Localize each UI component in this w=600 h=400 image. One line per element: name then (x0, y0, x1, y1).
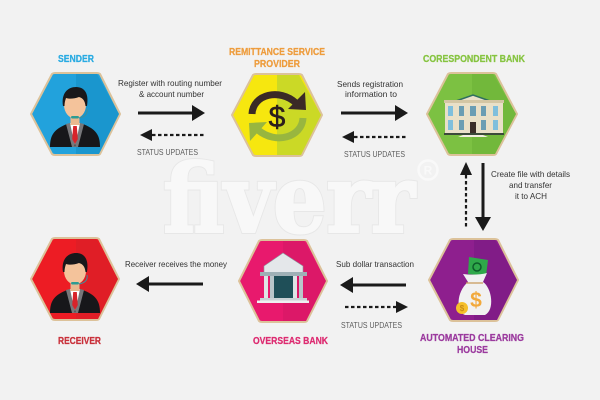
step 1 label: & account number (139, 89, 204, 99)
panel: remittance service provider (229, 47, 325, 156)
panel: overseas bank (239, 240, 329, 347)
step 4 label: Sub dollar transaction (336, 259, 414, 269)
watermark: fiverr logo: fiverr (163, 144, 417, 255)
arrow: remittance to corespondent (341, 105, 408, 121)
hexagon: remittance (232, 74, 322, 156)
heading: remittance service provider: PROVIDER (254, 59, 301, 70)
icon: money bag (456, 257, 491, 315)
icon: receiver person (50, 253, 100, 313)
heading: sender: SENDER (58, 54, 95, 65)
label: status updates 1: STATUS UPDATES (137, 148, 198, 157)
hexagon: corespondent bank (427, 73, 517, 155)
panel: receiver (31, 238, 119, 347)
icon: money bag: $ (470, 289, 482, 312)
step 3 label: and transfer (509, 180, 552, 190)
hexagon: overseas bank (239, 240, 327, 322)
hexagon: receiver (31, 238, 119, 320)
panel: corespondent bank (423, 54, 526, 155)
step 2 label: information to (345, 89, 397, 99)
hexagon: sender (31, 73, 120, 155)
arrow: clearing house to overseas bank (340, 277, 406, 293)
arrow: status dashed back to remittance (342, 131, 406, 143)
step 1 label (118, 78, 222, 99)
panel: automated clearing house (420, 239, 524, 356)
heading: receiver: RECEIVER (58, 336, 102, 347)
watermark: fiverr logo: fiverr (163, 144, 417, 255)
arrow: status dashed to clearing house (345, 301, 408, 313)
heading: overseas bank: OVERSEAS BANK (253, 336, 329, 347)
icon: money bag: $ (460, 304, 465, 313)
heading: automated clearing house: HOUSE (457, 345, 488, 356)
step 5 label: Receiver receives the money (125, 259, 228, 269)
panel: sender (31, 54, 120, 155)
arrow: status dashed back to sender (140, 129, 204, 141)
icon: classical bank building (444, 95, 504, 137)
hexagon: automated clearing house (429, 239, 518, 321)
label: status updates 3: STATUS UPDATES (341, 321, 402, 330)
heading: remittance service provider (229, 47, 325, 70)
heading: automated clearing house: AUTOMATED CLEARING (420, 333, 524, 344)
step 3 label: it to ACH (515, 191, 547, 201)
icon: sender person (50, 87, 100, 147)
heading: automated clearing house (420, 333, 524, 356)
step 1 label: Register with routing number (118, 78, 222, 88)
heading: corespondent bank: CORESPONDENT BANK (423, 54, 526, 65)
heading: remittance service provider: REMITTANCE SERVICE (229, 47, 325, 58)
arrow: corespondent down to clearing house (475, 163, 491, 231)
watermark: fiverr logo: R (424, 164, 433, 178)
step 2 label: Sends registration (337, 79, 403, 89)
label: status updates 2: STATUS UPDATES (344, 150, 405, 159)
arrow: status dashed up to corespondent (460, 162, 472, 228)
icon: circular dollar arrows: $ (269, 101, 286, 134)
step 2 label (337, 79, 403, 99)
arrow: sender to remittance (138, 105, 205, 121)
icon: bank with columns (257, 253, 309, 303)
arrow: overseas bank to receiver (136, 276, 203, 292)
step 3 label: Create file with details (491, 169, 570, 179)
step 3 label (491, 169, 570, 201)
